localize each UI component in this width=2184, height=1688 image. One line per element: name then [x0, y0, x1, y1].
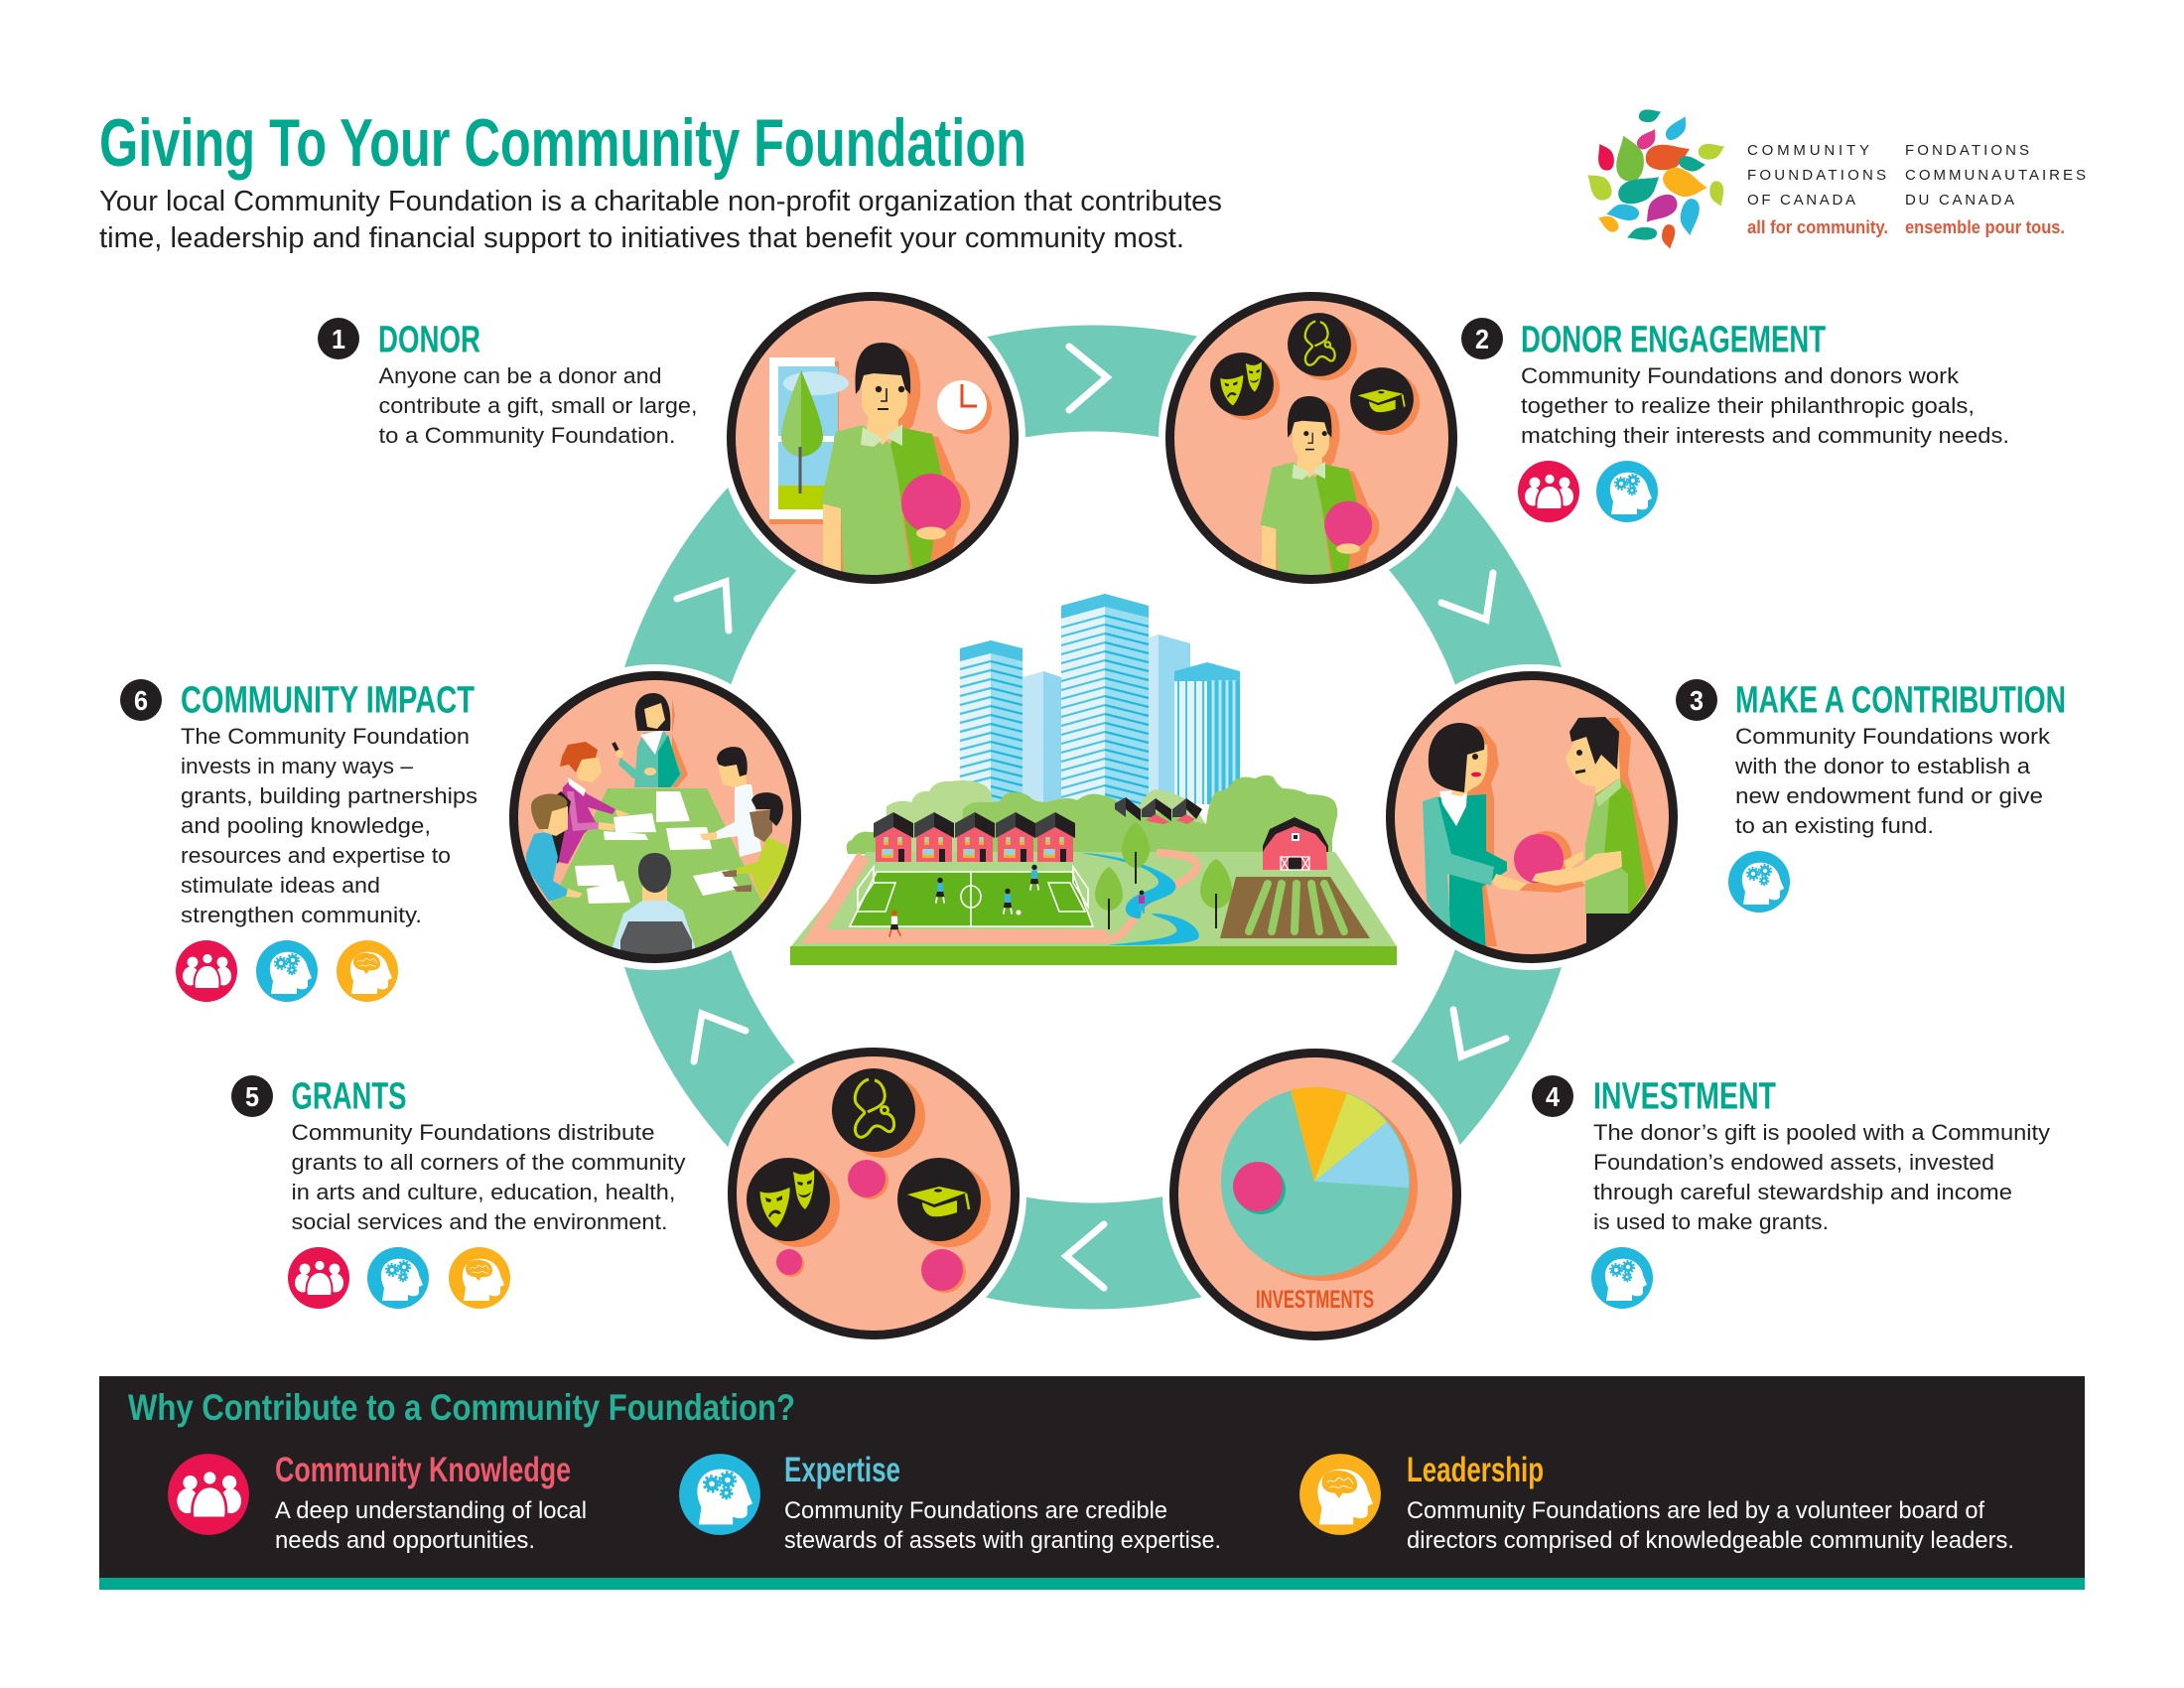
logo text: English: [1747, 142, 1888, 237]
step 4: investment: is used to make grants.: [1593, 1209, 1829, 1234]
step 4: investment: The donor’s gift is pooled with a Community: [1593, 1120, 2050, 1145]
panel: why contribute: [99, 1376, 2085, 1590]
step 2: donor engagement: [1461, 318, 2009, 522]
step 1: donor: Anyone can be a donor and: [379, 363, 661, 388]
icon: community knowledge: [288, 1247, 349, 1309]
icon: community knowledge: [176, 940, 237, 1002]
circle 4: investments pie chart: [1171, 1053, 1469, 1350]
panel heading: Why Contribute to a Community Foundation?: [128, 1387, 795, 1428]
step 2: donor engagement: DONOR ENGAGEMENT: [1521, 320, 1826, 361]
circle 1: donor illustration: [725, 288, 1023, 586]
step 2: donor engagement: 2: [1475, 324, 1489, 354]
icon: leadership: [337, 940, 398, 1002]
step 5: grants: [231, 1075, 685, 1309]
item: leadership: Community Foundations are led by a volunteer board of: [1407, 1497, 1984, 1524]
soccer players: [889, 865, 1038, 937]
step 5: grants: grants to all corners of the community: [292, 1150, 685, 1175]
icon: community knowledge: [1518, 461, 1579, 522]
step 1: donor: contribute a gift, small or large,: [379, 393, 697, 418]
step 6: community impact: grants, building partnerships: [181, 783, 478, 808]
barn: [1263, 817, 1328, 870]
step 4: investment: 4: [1546, 1081, 1560, 1112]
step 5: grants: social services and the environment.: [292, 1209, 667, 1234]
step 2: donor engagement: matching their interests and community needs.: [1521, 423, 2009, 448]
step 6: community impact: [120, 679, 478, 1002]
icon: expertise: [256, 940, 318, 1002]
intro text: [99, 186, 1222, 254]
centre community scene: [790, 594, 1397, 965]
step 6: community impact: invests in many ways –: [181, 754, 414, 778]
logo text: English: COMMUNITY: [1747, 142, 1869, 159]
item: community knowledge: [168, 1451, 587, 1554]
step 6: community impact: The Community Foundation: [181, 724, 470, 749]
logo text: French: COMMUNAUTAIRES: [1905, 167, 2086, 184]
row houses: [874, 812, 1075, 862]
logo mark: coloured paisley drops: [1584, 109, 1724, 249]
logo text: English: OF CANADA: [1747, 192, 1855, 209]
hills and trees behind the neighbourhood: [847, 775, 1337, 854]
logo text: French: [1905, 142, 2086, 237]
farm rows: [1220, 877, 1370, 938]
logo text: English: all for community.: [1747, 217, 1888, 237]
logo text: French: FONDATIONS: [1905, 142, 2029, 159]
step 4: investment: [1532, 1075, 2050, 1309]
step 1: donor: 1: [332, 324, 345, 354]
city towers: [960, 594, 1240, 814]
circle 3: contribution illustration: [1386, 671, 1678, 963]
step 6: community impact: COMMUNITY IMPACT: [181, 679, 475, 721]
step 6: community impact: stimulate ideas and: [181, 873, 380, 898]
title: Giving To Your Community Foundation: [99, 105, 1026, 181]
circle 5: grants illustration: [725, 1043, 1023, 1340]
item: leadership: Leadership: [1407, 1451, 1544, 1489]
infographic: [99, 109, 2085, 1590]
icon: expertise: [1596, 461, 1658, 522]
circle 2: donor engagement illustration: [1161, 288, 1459, 591]
ground platform: [790, 852, 1397, 965]
step 5: grants: Community Foundations distribute: [292, 1120, 655, 1145]
item: expertise: Community Foundations are credible: [784, 1497, 1167, 1524]
intro text: time, leadership and financial support to initiatives that benefit your community most.: [99, 222, 1184, 254]
step 1: donor: DONOR: [378, 320, 480, 361]
item: leadership: [1299, 1451, 2014, 1554]
soccer field: [850, 867, 1093, 926]
logo text: French: DU CANADA: [1905, 192, 2014, 209]
item: leadership: directors comprised of knowledgeable community leaders.: [1407, 1527, 2014, 1554]
item: expertise: stewards of assets with granting expertise.: [784, 1527, 1221, 1554]
step 3: make a contribution: new endowment fund or give: [1735, 783, 2043, 808]
icon: expertise: [1728, 851, 1790, 913]
step 3: make a contribution: Community Foundations work: [1735, 724, 2051, 749]
step 3: make a contribution: with the donor to establish a: [1734, 754, 2031, 778]
step 5: grants: GRANTS: [292, 1076, 407, 1118]
item: community knowledge: A deep understanding of local: [275, 1497, 587, 1524]
step 1: donor: [318, 318, 697, 448]
step 4: investment: Foundation’s endowed assets, invested: [1593, 1150, 1994, 1175]
step 3: make a contribution: to an existing fund.: [1735, 813, 1934, 838]
item: expertise: [679, 1451, 1221, 1554]
icon: leadership: [449, 1247, 510, 1309]
walker: [1139, 891, 1145, 914]
logo: Community Foundations of Canada: [1584, 109, 2086, 249]
step 2: donor engagement: Community Foundations and donors work: [1521, 363, 1960, 388]
item: community knowledge: Community Knowledge: [275, 1451, 571, 1489]
item: expertise: Expertise: [784, 1451, 900, 1489]
running path: [814, 853, 1197, 939]
process ring with chevrons: [502, 285, 1685, 1347]
logo text: French: ensemble pour tous.: [1905, 217, 2065, 237]
step 6: community impact: resources and expertise to: [181, 843, 451, 868]
step 4: investment: INVESTMENT: [1593, 1076, 1776, 1118]
logo text: English: FOUNDATIONS: [1747, 167, 1886, 184]
step 5: grants: in arts and culture, education, health,: [292, 1180, 675, 1204]
step 3: make a contribution: [1676, 679, 2066, 913]
river: [1081, 853, 1199, 945]
step 3: make a contribution: 3: [1690, 685, 1704, 716]
step 4: investment: through careful stewardship and income: [1593, 1180, 2012, 1204]
item: community knowledge: needs and opportunities.: [275, 1527, 535, 1554]
circle 6: community impact meeting illustration: [506, 665, 804, 973]
step 3: make a contribution: MAKE A CONTRIBUTION: [1735, 679, 2066, 721]
trees by the river: [1095, 822, 1232, 929]
step 6: community impact: and pooling knowledge,: [181, 813, 431, 838]
step 5: grants: 5: [245, 1081, 259, 1112]
step 6: community impact: strengthen community.: [181, 903, 422, 927]
intro text: Your local Community Foundation is a charitable non-profit organization that contributes: [99, 186, 1222, 217]
label: investments: INVESTMENTS: [1256, 1286, 1374, 1314]
step 2: donor engagement: together to realize their philanthropic goals,: [1521, 393, 1975, 418]
step 1: donor: to a Community Foundation.: [379, 423, 675, 448]
icon: expertise: [367, 1247, 429, 1309]
step 6: community impact: 6: [134, 685, 148, 716]
icon: expertise: [1591, 1247, 1653, 1309]
